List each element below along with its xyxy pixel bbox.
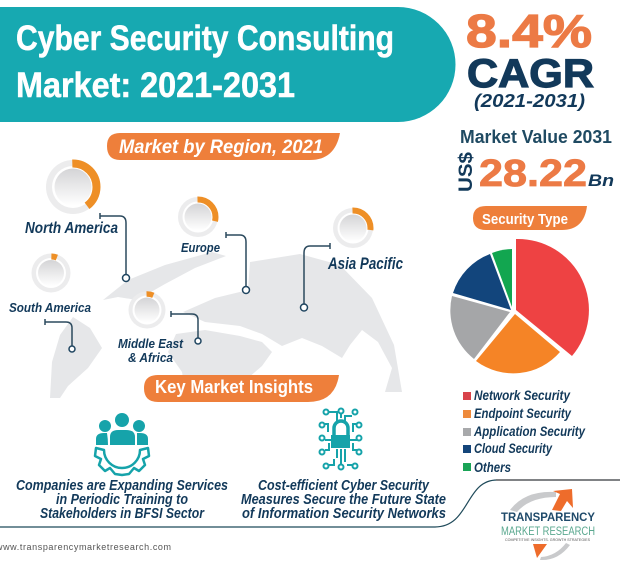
heading: key market insights (144, 375, 339, 402)
heading: market by region: Market by Region, 2021 (119, 136, 323, 158)
market value 2031: Bn (588, 171, 614, 190)
insight text: security networks: Measures Secure the Future State (241, 492, 446, 508)
heading: security type (473, 206, 587, 230)
region: europe (178, 197, 250, 294)
market value 2031: Market Value 2031 (460, 126, 612, 147)
website url: www.transparencymarketresearch.com (0, 542, 171, 552)
CAGR block (466, 5, 594, 111)
icon: circuit padlock (320, 408, 362, 470)
CAGR block: CAGR (467, 52, 594, 96)
region: middle east and africa (118, 292, 201, 365)
region: south america (9, 254, 91, 352)
market value 2031: US$ (456, 152, 477, 192)
legend: Cloud Security (474, 440, 553, 456)
region: middle east and africa: & Africa (128, 350, 173, 365)
insight text: security networks (241, 478, 446, 522)
legend (463, 387, 586, 475)
legend: Network Security (474, 387, 571, 403)
icon: people and gear (95, 413, 149, 475)
region: north america (25, 160, 130, 282)
insight text: security networks: of Information Security Networks (242, 506, 446, 522)
title banner: Cyber Security Consulting (16, 19, 394, 58)
pie chart: security type (450, 239, 589, 373)
logo: transparency market research: MARKET RESEARCH (501, 526, 595, 538)
world map background (50, 252, 402, 398)
market value 2031 (456, 126, 614, 195)
region: europe: Europe (181, 240, 220, 255)
legend: Application Security (473, 423, 586, 439)
legend: Endpoint Security (474, 405, 572, 421)
region: north america: North America (25, 220, 118, 237)
title banner (0, 7, 455, 122)
region: asia pacific: Asia Pacific (327, 255, 403, 273)
CAGR block: 8.4% (466, 5, 592, 57)
heading: security type: Security Type (482, 211, 568, 228)
insight text: training: Stakeholders in BFSI Sector (40, 506, 205, 522)
legend: Others (474, 459, 511, 475)
logo: transparency market research (501, 489, 595, 560)
region: asia pacific (300, 208, 403, 311)
insight text: training (16, 478, 228, 522)
logo: transparency market research: COMPETITIVE INSIGHTS. GROWTH STRATEGIES (505, 538, 591, 542)
region: middle east and africa: Middle East (118, 336, 184, 351)
insight text: security networks: Cost-efficient Cyber Security (258, 478, 430, 494)
title banner: Market: 2021-2031 (16, 66, 295, 105)
market value 2031: 28.22 (479, 153, 587, 195)
insight text: training: Companies are Expanding Services (16, 478, 228, 494)
region: south america: South America (9, 300, 91, 315)
logo: transparency market research: TRANSPARENCY (501, 512, 595, 524)
CAGR block: (2021-2031) (474, 91, 585, 111)
heading: key market insights: Key Market Insights (155, 377, 313, 397)
insight text: training: in Periodic Training to (56, 492, 188, 508)
